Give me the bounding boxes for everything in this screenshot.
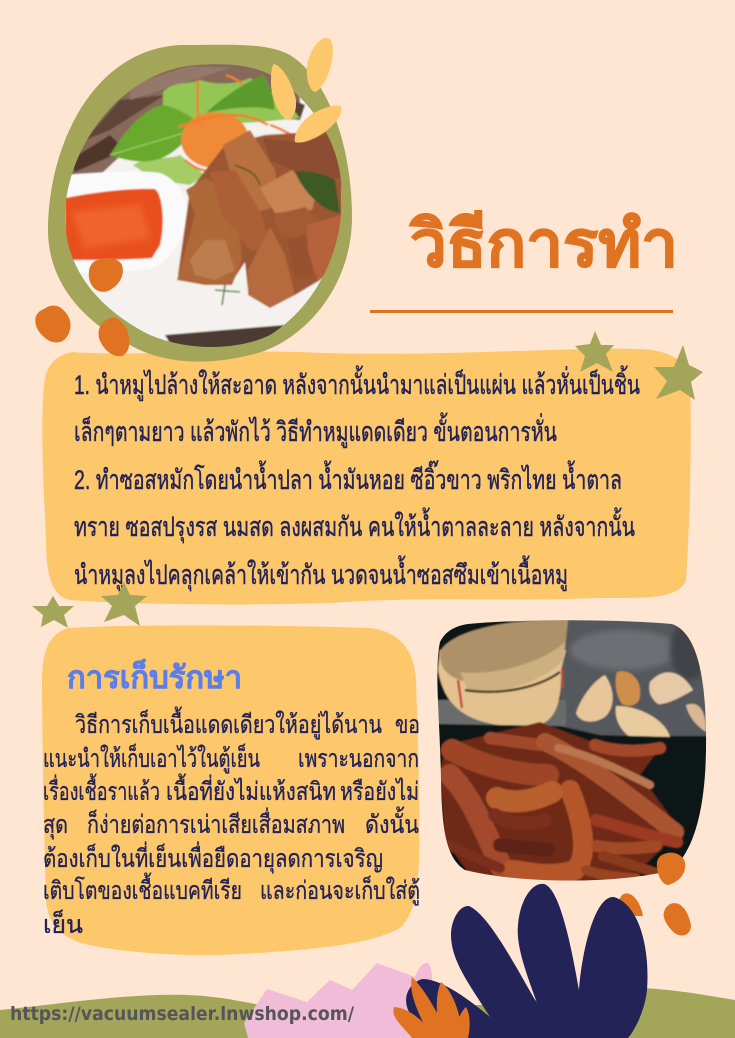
olive hills: [0, 988, 735, 1038]
text: step lines: [74, 365, 640, 592]
icon: olive stars: [32, 331, 703, 628]
panel: storage: [42, 625, 420, 955]
panel background: [42, 349, 691, 604]
pork mass: [440, 722, 680, 885]
panel: steps: [42, 349, 691, 604]
greens: [163, 78, 300, 125]
garlic: [576, 675, 613, 722]
icon: orange blobs top: [35, 258, 129, 356]
text: storage paragraph: ต้องเก็บในที่เย็นเพื่อยืดอายุลดการเจริญ: [43, 841, 383, 874]
text: storage paragraph: หรือยังไม่: [340, 777, 419, 806]
text: storage paragraph: ดังนั้น: [365, 806, 419, 839]
text: storage paragraph: เรื่องเชื้อราแล้ว: [43, 773, 160, 806]
image: fried pork plate with olive frame: [48, 45, 352, 362]
text: step lines: เล็กๆตามยาว แล้วพักไว้ วิธีทำหมูแดดเดียว ขั้นตอนการหั่น: [74, 412, 557, 448]
image: dried pork photo: [436, 618, 710, 886]
text: storage paragraph: แนะนำให้เก็บเอาไว้ในตู้เย็น: [43, 743, 260, 774]
text: storage paragraph: ขอ: [395, 711, 420, 739]
icon: navy leaves: [406, 884, 648, 1038]
text: storage paragraph: และก่อนจะเก็บใส่ตู้: [260, 875, 420, 906]
text: storage paragraph: เย็น: [43, 909, 83, 939]
pork mass: [178, 130, 342, 305]
panel background: [42, 625, 419, 955]
icon: orange leaves: [393, 977, 470, 1038]
website url: https://vacuumsealer.lnwshop.com/: [10, 1003, 354, 1025]
text: storage paragraph: เนื้อที่ยังไม่แห้งสนิท: [166, 773, 336, 806]
text: storage paragraph: สุด: [43, 811, 68, 840]
sauce dish: [66, 172, 187, 273]
text: storage paragraph: ก็ง่ายต่อการเน่าเสียเสื่อมสภาพ: [87, 807, 345, 839]
stone surface: [560, 618, 710, 736]
text: storage paragraph: วิธีการเก็บเนื้อแดดเดียวให้อยู่ได้นาน: [75, 706, 382, 740]
icon: yellow leaves: [271, 38, 342, 143]
title: วิธีการทำ: [409, 208, 678, 280]
title underline: [370, 310, 673, 313]
steamer: [438, 650, 566, 727]
text: storage paragraph: เติบโตของเชื้อแบคทีเรีย: [43, 872, 242, 905]
text: storage paragraph: เพราะนอกจาก: [298, 745, 419, 773]
olive frame: [48, 45, 352, 362]
carrots: [181, 112, 249, 168]
icon: orange blobs right: [618, 853, 691, 936]
pork chunks: [177, 178, 242, 285]
heading: การเก็บรักษา: [67, 658, 242, 695]
black pan: [439, 724, 670, 738]
fried pork photo: [60, 60, 350, 355]
pink shape: [244, 963, 445, 1038]
text: storage paragraph: [43, 706, 420, 939]
